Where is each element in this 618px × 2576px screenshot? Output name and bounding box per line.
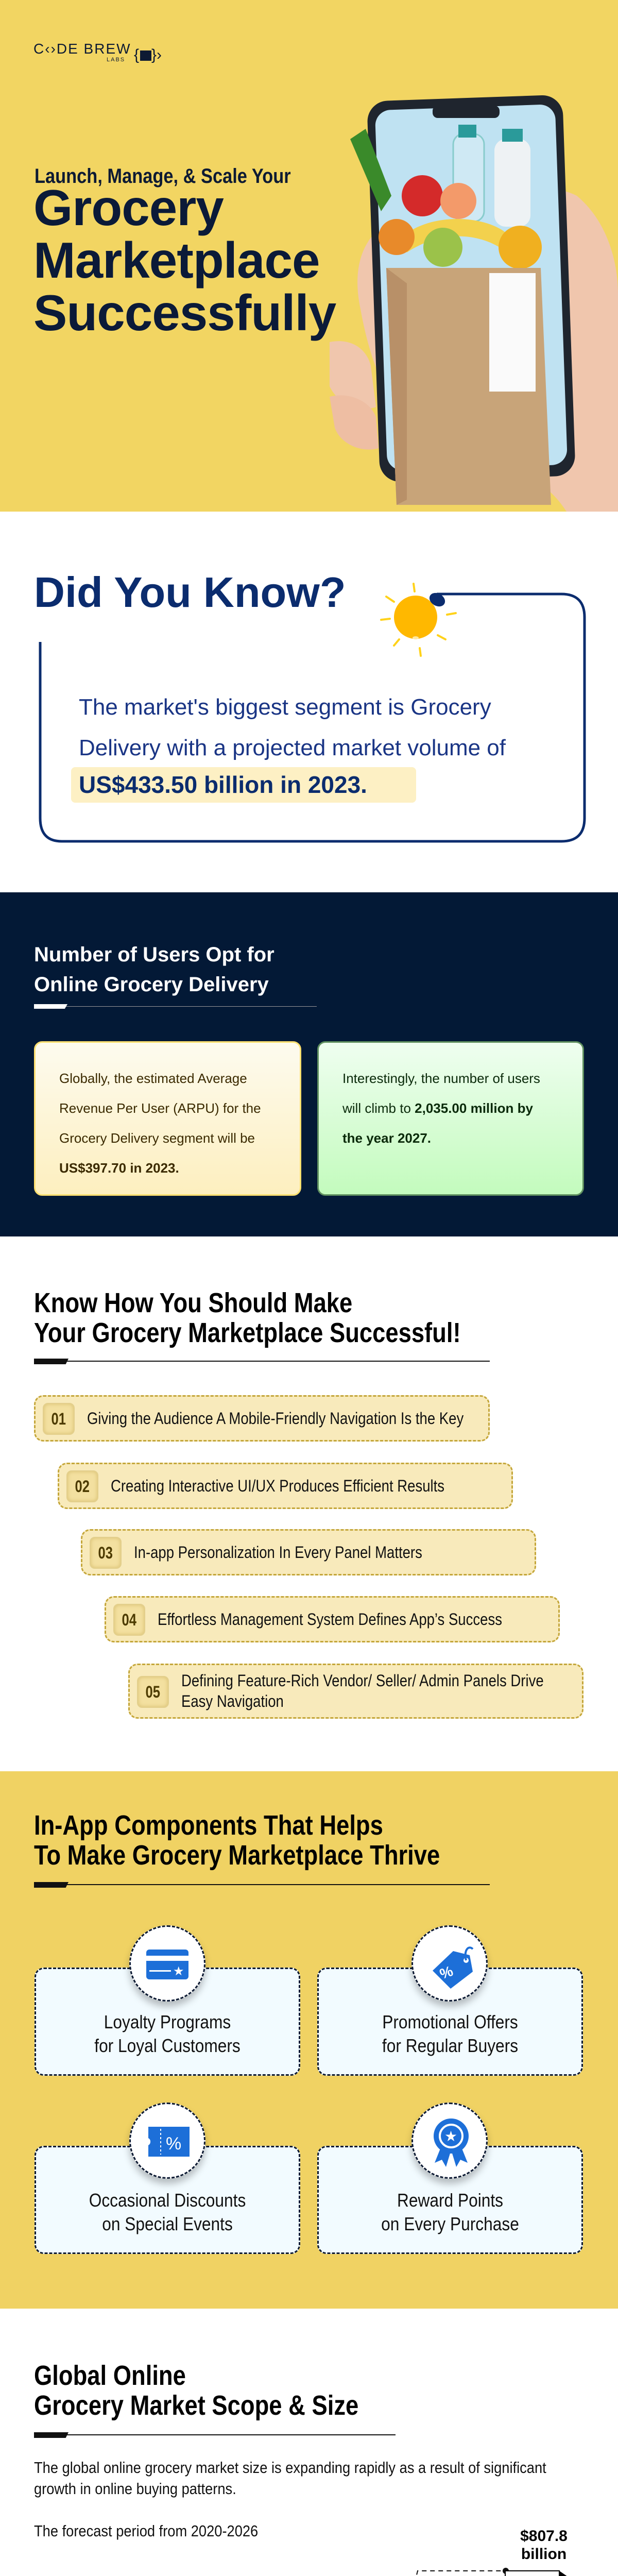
heading: Your Grocery Marketplace Successful! [34,1317,461,1348]
subtitle: Launch, Manage, & Scale Your [35,165,291,188]
card: users: the year 2027. [342,1130,431,1146]
card: ARPU: Revenue Per User (ARPU) for the [59,1100,261,1116]
heading: Number of Users Opt for [34,943,274,966]
logo: C‹›DE BREW [33,41,131,57]
item 05: 05 [146,1683,160,1701]
logo: { [134,46,139,63]
forecast text: The forecast period from 2020-2026 [34,2522,258,2540]
heading [34,943,274,996]
logo: LABS [107,57,125,63]
card: users [317,1041,584,1196]
intro text: The global online grocery market size is expanding rapidly as a result of significant [34,2459,546,2477]
illustration: hand holding phone with grocery bag [330,95,618,512]
icon: coupon [129,2103,205,2179]
callout box [39,592,586,843]
heading [34,1810,440,1871]
logo [33,41,162,63]
card: ARPU: Globally, the estimated Average [59,1071,247,1086]
heading [34,1287,461,1348]
item 04: 04 [122,1611,136,1629]
bar chart [416,2528,568,2576]
text: market segment [79,694,506,760]
icon: award ribbon [411,2103,488,2179]
section: global market [34,2365,567,2576]
card: reward points [317,2146,583,2254]
text: market segment: The market's biggest segment is Grocery [79,694,491,720]
card: promotional offers [317,1968,583,2076]
section: in-app components [0,1771,618,2309]
card: occasional discounts: Occasional Discounts [89,2190,246,2211]
underline [34,1006,317,1007]
heading: To Make Grocery Marketplace Thrive [34,1840,440,1871]
section: know how [34,1292,583,1719]
card: users: will climb to 2,035.00 million by [342,1100,533,1116]
card: occasional discounts [35,2146,300,2254]
item 03: 03 [98,1544,113,1562]
icon: award ribbon: ★ [444,2128,457,2145]
card: ARPU: US$397.70 in 2023. [59,1160,179,1176]
logo: }› [151,46,162,63]
item 01 [34,1395,490,1442]
icon: lightbulb [380,583,457,657]
section: did you know [0,512,618,892]
card: ARPU [34,1041,301,1196]
heading: Grocery Market Scope & Size [34,2390,358,2421]
icon: tag: % [438,1963,455,1982]
heading: In-App Components That Helps [34,1810,383,1841]
icon: loyalty card [129,1925,205,2002]
item 03: In-app Personalization In Every Panel Matters [134,1543,422,1562]
heading: Know How You Should Make [34,1287,352,1318]
item 04: Effortless Management System Defines App’s Success [158,1610,502,1629]
item 05: Defining Feature-Rich Vendor/ Seller/ Admin Panels Drive [181,1671,544,1690]
intro text: growth in online buying patterns. [34,2480,236,2498]
item 05: Easy Navigation [181,1692,284,1710]
heading [34,2360,358,2421]
card: reward points: on Every Purchase [381,2213,519,2234]
bar chart: $807.8 [520,2528,568,2545]
icon: tag [411,1925,488,2002]
title: Grocery [33,179,224,236]
title [33,179,336,341]
item 01: Giving the Audience A Mobile-Friendly Navigation Is the Key [87,1409,464,1428]
card: loyalty programs [35,1968,300,2076]
card: promotional offers: for Regular Buyers [382,2035,518,2056]
highlight: US$433.50 billion [71,767,416,803]
item 03 [81,1529,536,1575]
card: loyalty programs: Loyalty Programs [104,2011,231,2032]
section: hero [0,0,618,512]
item 05 [128,1664,583,1719]
intro text [34,2459,546,2498]
underline [34,1884,490,1885]
underline [34,1361,490,1362]
card: promotional offers: Promotional Offers [382,2011,518,2032]
heading: Did You Know: Did You Know? [34,568,346,616]
item 02: Creating Interactive UI/UX Produces Efficient Results [111,1477,444,1495]
bar chart: billion [521,2546,566,2563]
item 02: 02 [75,1477,90,1496]
card: occasional discounts: on Special Events [102,2213,233,2234]
highlight: US$433.50 billion: US$433.50 billion in 2023. [79,771,367,798]
text: market segment: Delivery with a projected market volume of [79,735,506,760]
item 01: 01 [52,1410,66,1428]
icon: coupon: % [166,2134,181,2154]
card: loyalty programs: for Loyal Customers [94,2035,241,2056]
item 04 [105,1596,560,1642]
card: reward points: Reward Points [397,2190,503,2211]
card: users: Interestingly, the number of users [342,1071,540,1086]
title: Successfully [33,284,336,341]
heading: Online Grocery Delivery [34,973,269,996]
icon: loyalty card: ★ [173,1964,184,1978]
item 02 [58,1463,513,1509]
section: number of users [0,892,618,1236]
card: ARPU: Grocery Delivery segment will be [59,1130,255,1146]
title: Marketplace [33,232,320,289]
underline [34,2434,396,2435]
heading: Global Online [34,2360,186,2391]
